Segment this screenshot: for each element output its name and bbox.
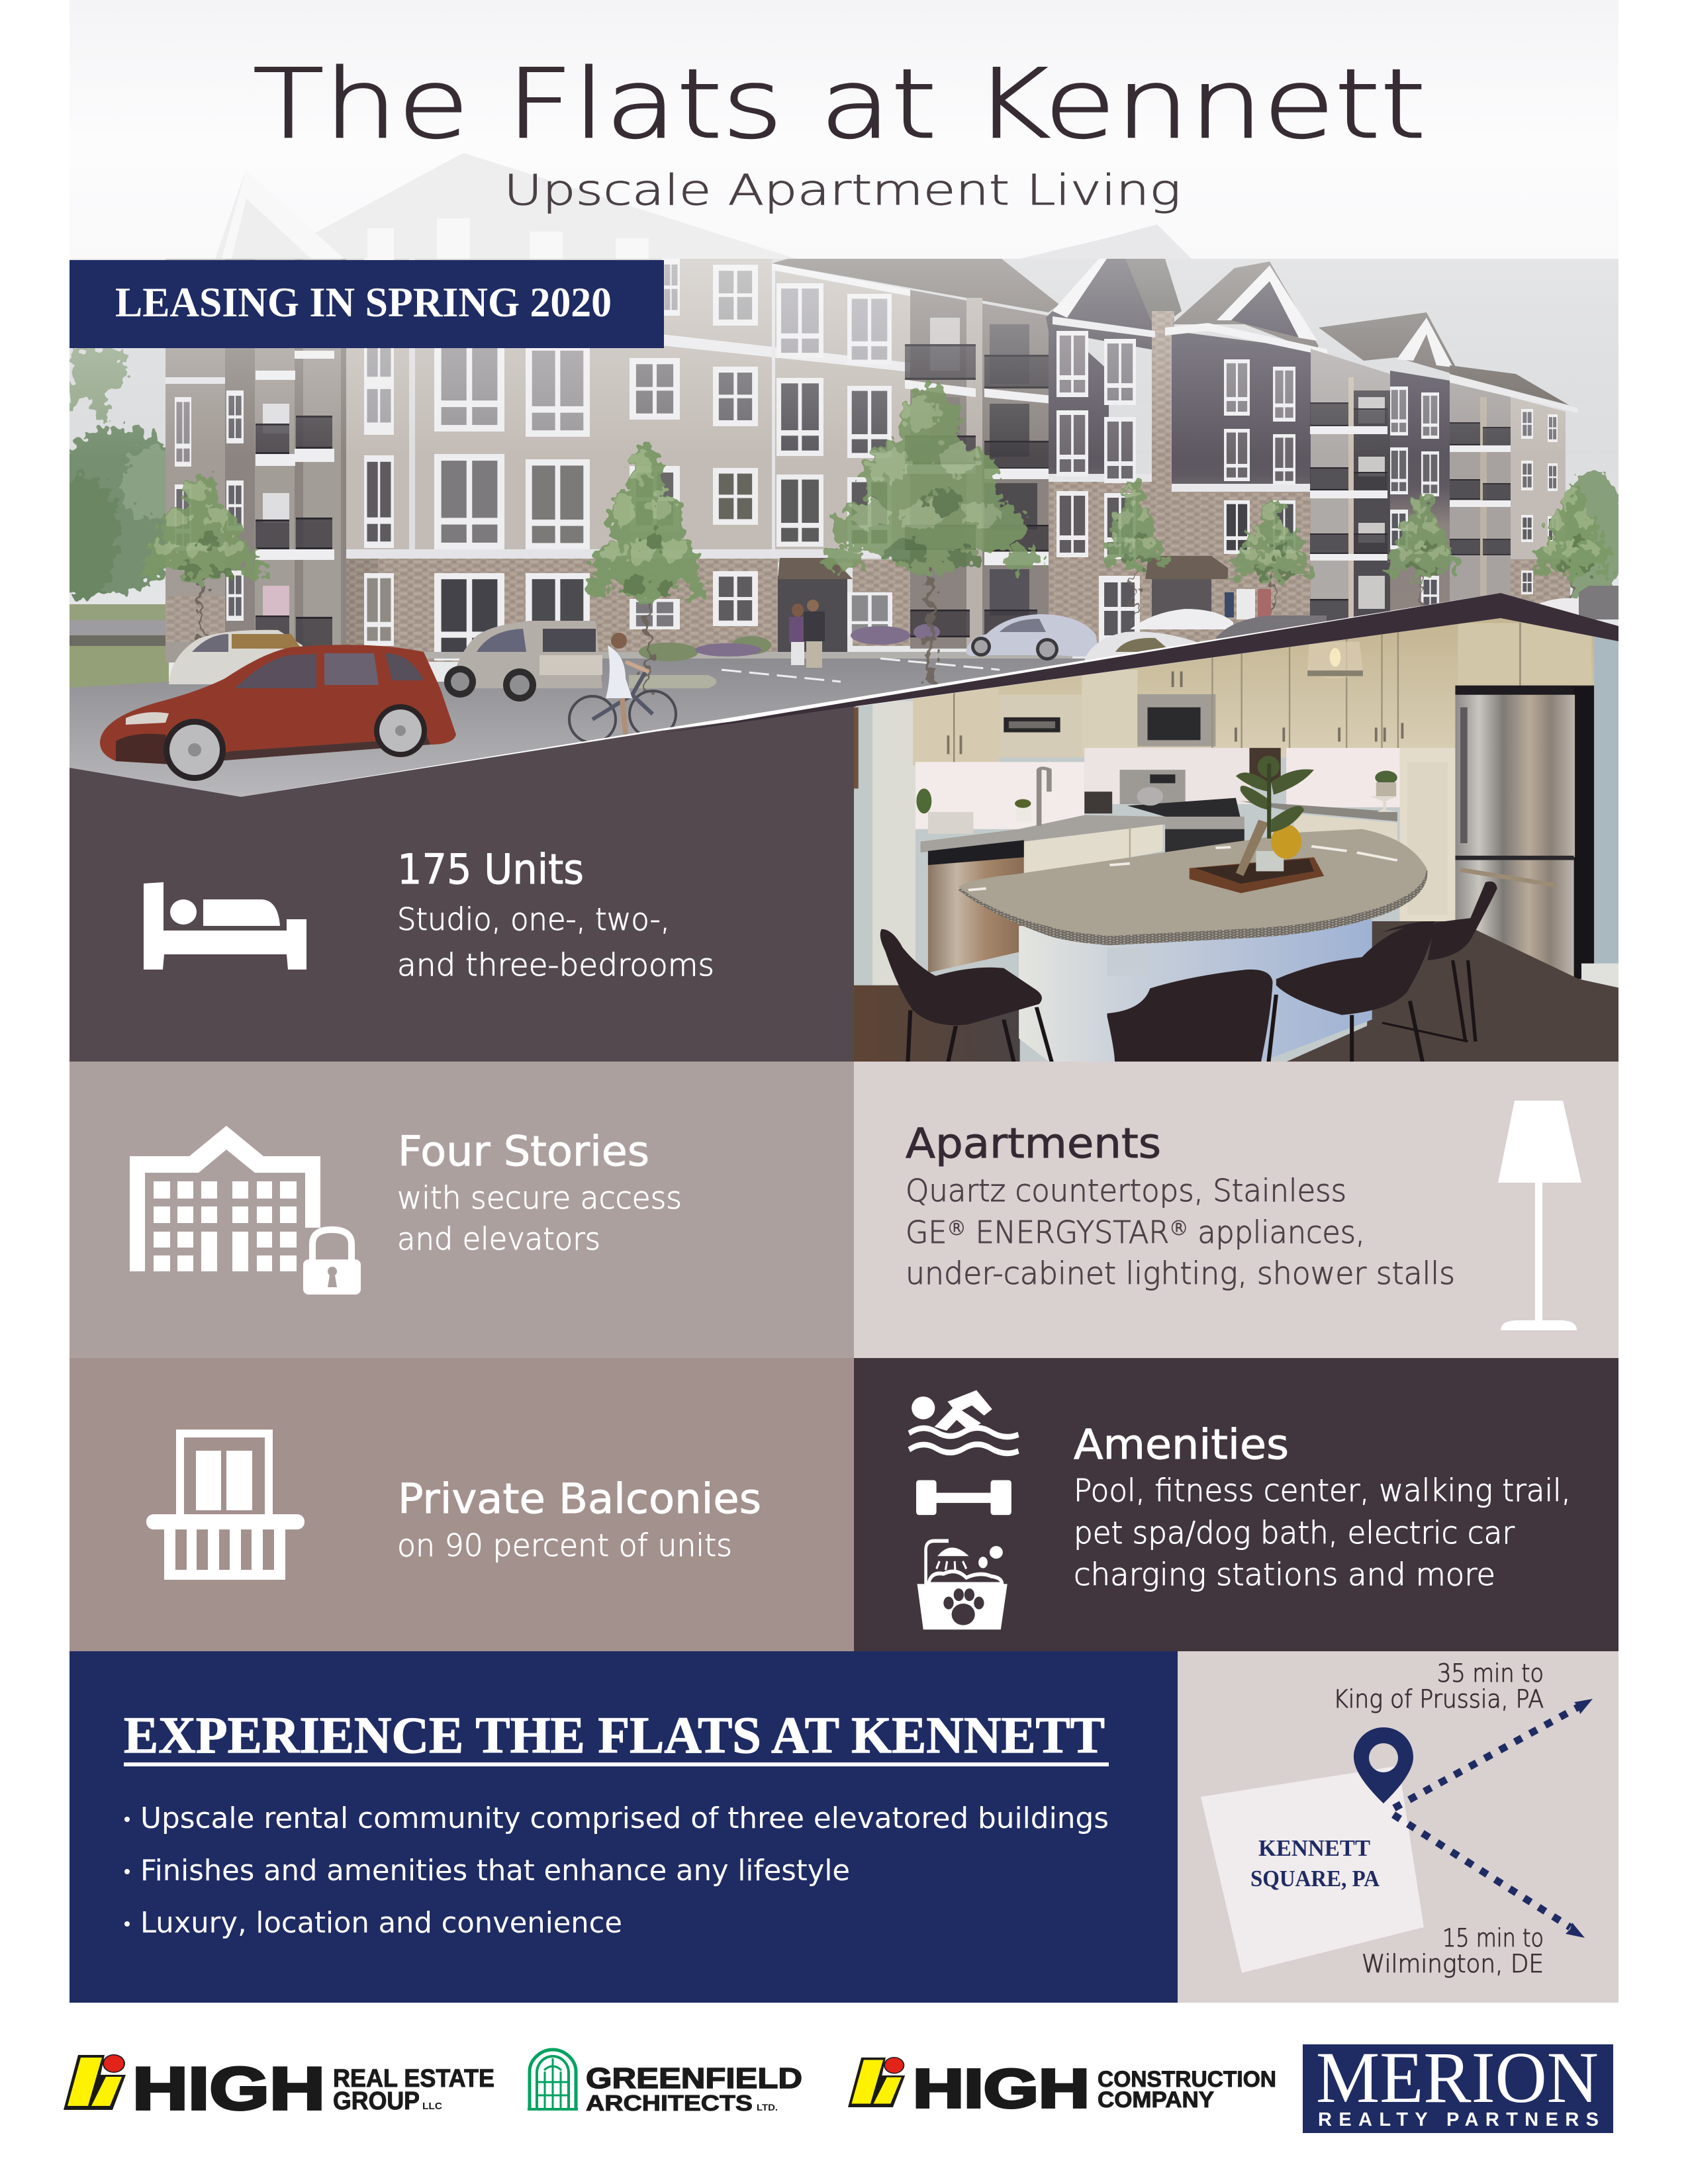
arrow to wilmington (1393, 1815, 1585, 1938)
text: 175 units: 175 Units (397, 845, 584, 893)
label: kennett square: SQUARE, PA (1250, 1866, 1380, 1891)
text: apartments: Quartz countertops, Stainless (906, 1173, 1346, 1208)
label: kennett square (1250, 1835, 1380, 1891)
logo: high construction company: CONSTRUCTION (1098, 2067, 1276, 2092)
logo: greenfield architects: LTD. (757, 2102, 778, 2113)
text: amenities: pet spa/dog bath, electric car (1074, 1515, 1515, 1551)
cyclist (569, 633, 676, 743)
subtitle: Upscale Apartment Living (504, 166, 1181, 214)
pedestrians (789, 589, 1271, 668)
panel: location map (1178, 1651, 1618, 2003)
label: kennett square: KENNETT (1258, 1835, 1370, 1861)
drive times: Wilmington, DE (1362, 1950, 1544, 1978)
background trees and lawn (46, 348, 1625, 688)
main beige facade with windows (346, 259, 915, 563)
logo: merion realty partners: MERION (1316, 2037, 1599, 2118)
drive times (1333, 1659, 1544, 1978)
icon: arched window (528, 2050, 578, 2110)
logo: high construction company: COMPANY (1098, 2087, 1214, 2113)
text: amenities (1074, 1420, 1571, 1592)
stone base and ground floor windows (346, 558, 915, 662)
bar stools (880, 882, 1497, 1062)
bullet list (124, 1801, 1109, 1940)
logo: greenfield architects: ARCHITECTS (586, 2091, 753, 2115)
road, sidewalk and landscaping (70, 624, 1096, 797)
parked cars (169, 586, 1618, 702)
panel: kitchen photo (853, 608, 1624, 1066)
text: four stories (397, 1127, 682, 1257)
roof shaped band (662, 593, 1618, 733)
text: apartments: ® (947, 1217, 966, 1240)
text: apartments: Apartments (906, 1119, 1161, 1167)
navy banner (70, 260, 664, 348)
logo: high construction company: HIGH (913, 2058, 1090, 2119)
text: private balconies: Private Balconies (398, 1475, 761, 1523)
main roof and eave (772, 259, 1059, 312)
logo: high construction company (848, 2057, 1276, 2119)
logo: merion realty partners: REALTY PARTNERS (1318, 2109, 1599, 2130)
navy banner: LEASING IN SPRING 2020 (115, 279, 612, 326)
recessed balconies (905, 290, 1053, 649)
drive times: King of Prussia, PA (1333, 1685, 1544, 1713)
dark gabled towers (1046, 259, 1457, 649)
logo: greenfield architects: GREENFIELD (586, 2062, 802, 2095)
icon: balcony (146, 1430, 305, 1580)
washed out fade over upper building (70, 259, 1618, 437)
icons: pool, fitness, pet spa (909, 1390, 1019, 1629)
icon: bed (144, 882, 306, 970)
panel: 175 units (70, 705, 856, 1062)
text: apartments (906, 1119, 1455, 1291)
icon: map pin (1354, 1727, 1413, 1803)
panel: amenities (854, 1358, 1618, 1651)
text: apartments: GE (906, 1214, 949, 1250)
text: four stories: with secure access (397, 1180, 682, 1216)
title: The Flats at Kennett (253, 48, 1426, 159)
drive times: 15 min to (1442, 1924, 1544, 1952)
kennett square area (1201, 1766, 1424, 1973)
panel: apartments (854, 1062, 1618, 1358)
logo: high real estate group: LLC (422, 2101, 442, 2112)
logo: high real estate group (64, 2054, 494, 2122)
text: apartments: ® (1169, 1217, 1188, 1240)
logo: high real estate group: HIGH (132, 2056, 325, 2122)
panel: four stories (70, 1062, 854, 1358)
right balconies and wing (1310, 349, 1578, 629)
text: amenities: Amenities (1074, 1420, 1289, 1469)
logo: greenfield architects (528, 2050, 802, 2115)
text: 175 units: and three-bedrooms (397, 947, 714, 983)
bullet list: Luxury, location and convenience (140, 1906, 622, 1940)
text: amenities: Pool, fitness center, walking trail, (1074, 1473, 1571, 1508)
arrow to king of prussia (1394, 1699, 1593, 1808)
icon: lamp (1498, 1101, 1581, 1330)
heading underline (124, 1762, 1109, 1766)
text: four stories: Four Stories (398, 1127, 649, 1175)
panel: experience the flats at kennett (70, 1651, 1178, 2003)
panel: private balconies (70, 1358, 854, 1651)
text: 175 units: Studio, one-, two-, (397, 901, 670, 937)
bullet list: Finishes and amenities that enhance any lifestyle (140, 1854, 850, 1888)
text: amenities: charging stations and more (1074, 1557, 1495, 1592)
text: four stories: and elevators (397, 1221, 600, 1257)
logo: high real estate group: REAL ESTATE (333, 2065, 494, 2093)
text: private balconies: on 90 percent of units (397, 1527, 732, 1563)
icon: secure building (130, 1126, 361, 1295)
logo: high real estate group: GROUP (333, 2087, 420, 2115)
text: 175 units (397, 845, 714, 983)
bullet list: Upscale rental community comprised of three elevatored buildings (140, 1801, 1109, 1835)
header band with faded building (70, 0, 1618, 259)
street trees (139, 386, 1613, 695)
text: apartments: ENERGYSTAR (966, 1214, 1169, 1250)
left tower facades (165, 259, 346, 662)
text: apartments: appliances, (1188, 1214, 1365, 1250)
red SUV (100, 645, 456, 781)
text: private balconies (397, 1475, 761, 1563)
text: apartments: under-cabinet lighting, shower stalls (906, 1255, 1455, 1291)
kitchen interior (853, 608, 1624, 1062)
drive times: 35 min to (1437, 1659, 1544, 1688)
heading: EXPERIENCE THE FLATS AT KENNETT (124, 1706, 1105, 1764)
photo: building exterior rendering (46, 259, 1625, 808)
